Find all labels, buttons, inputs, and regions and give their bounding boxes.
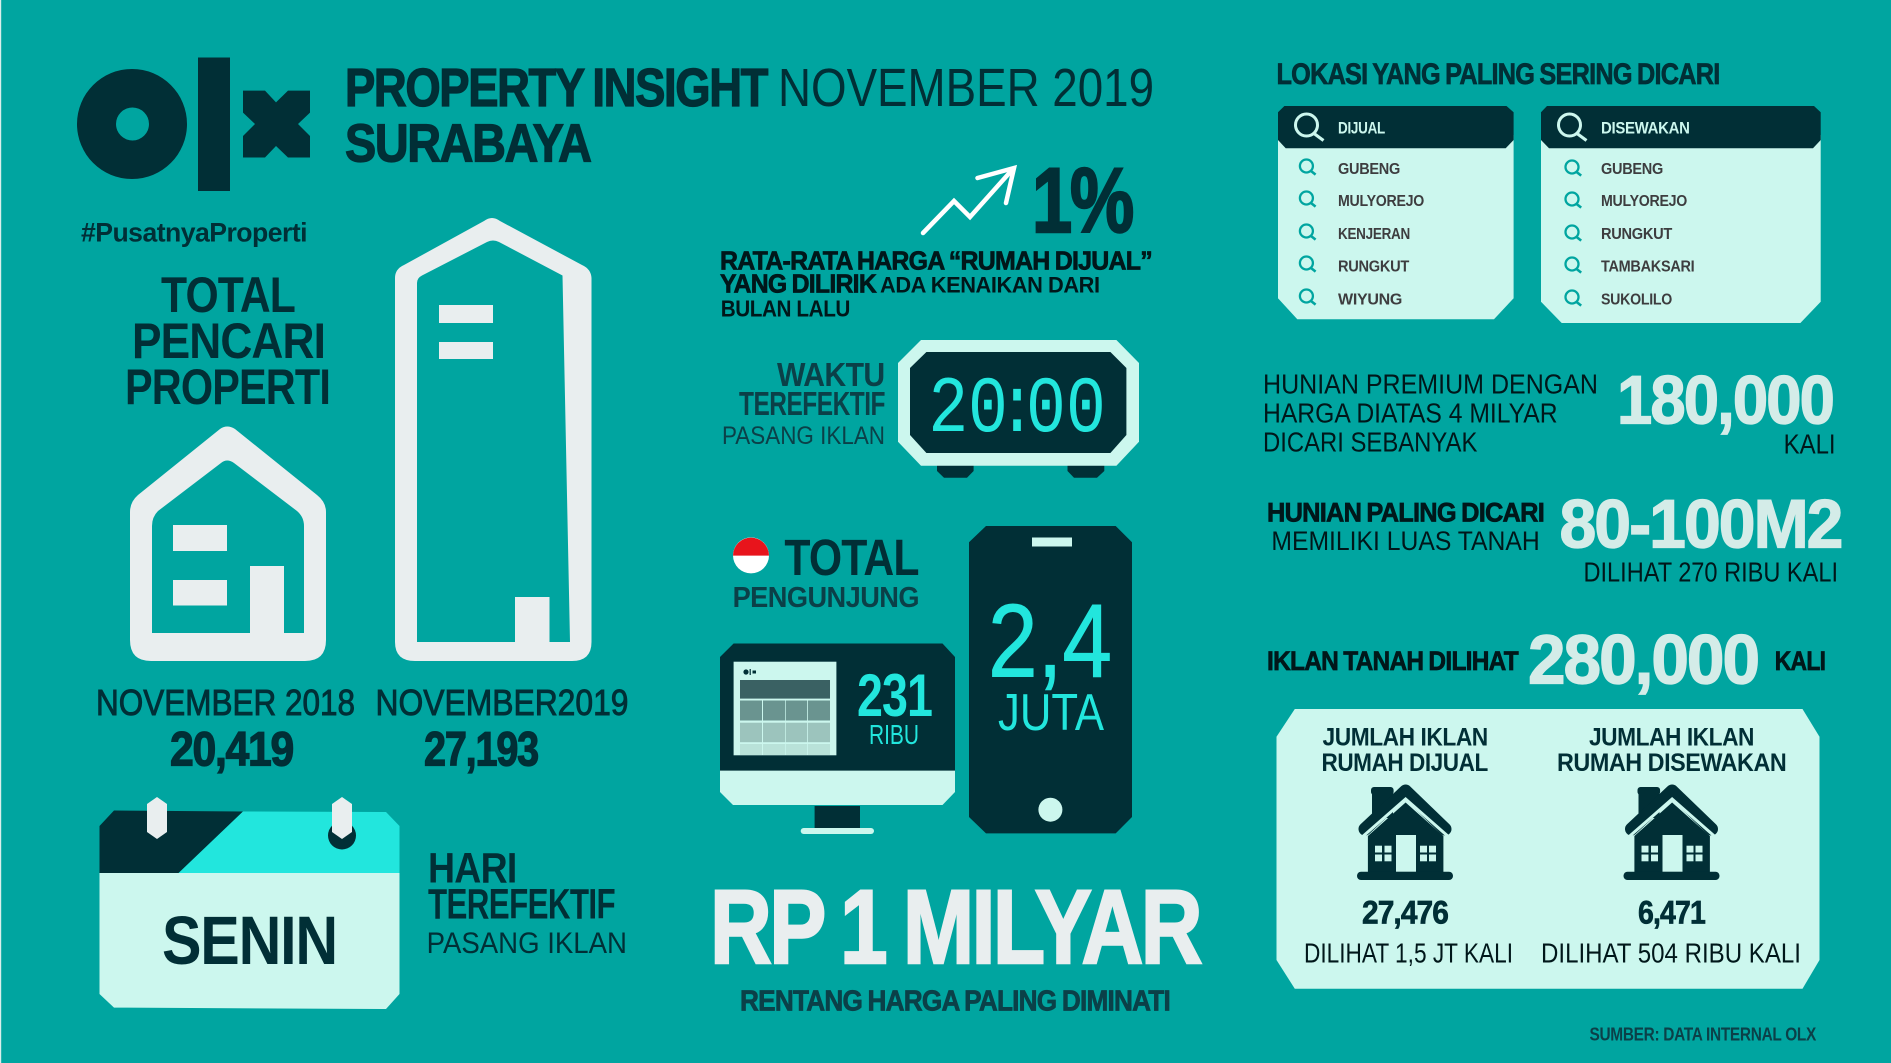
panel: jumlah iklan [1276, 709, 1820, 989]
panel: dijual: MULYOREJO [1338, 193, 1424, 210]
hashtag: #PusatnyaProperti [81, 218, 307, 248]
stat: hunian premium: 180,000 [1617, 361, 1833, 438]
title: PROPERTY INSIGHT [345, 58, 768, 118]
panel: dijual: WIYUNG [1338, 291, 1402, 308]
panel: disewakan: SUKOLILO [1601, 291, 1672, 308]
jumlah iklan rumah disewakan: 6,471 [1638, 894, 1705, 930]
stat: hunian premium: DICARI SEBANYAK [1263, 427, 1478, 458]
stat: hunian premium: KALI [1784, 428, 1836, 459]
stat: hunian paling dicari: DILIHAT 270 RIBU KALI [1584, 557, 1838, 588]
heading: total pengunjung [733, 529, 919, 614]
stat: november 2018: 20,419 [170, 724, 293, 776]
panel: disewakan: GUBENG [1601, 161, 1663, 178]
icon: tall building 2019 [395, 218, 592, 661]
stat: hunian paling dicari: HUNIAN PALING DICARI [1267, 498, 1544, 528]
logo: OLX [77, 58, 310, 191]
icon: house [1357, 787, 1453, 880]
icon: smartphone 2,4 juta: JUTA [998, 684, 1104, 742]
icon: smartphone 2,4 juta [969, 526, 1132, 833]
jumlah iklan rumah disewakan [1541, 724, 1801, 969]
panel: dijual: DIJUAL [1338, 118, 1385, 137]
icon: desktop monitor 231 ribu: RIBU [869, 719, 919, 750]
heading: total pengunjung: PENGUNJUNG [733, 582, 919, 614]
heading: total pengunjung: TOTAL [784, 529, 919, 586]
stat: november 2019: 27,193 [424, 724, 538, 776]
text: hari terefektif: PASANG IKLAN [427, 927, 627, 960]
icon: small building 2018 [130, 426, 326, 661]
icon: indonesian flag [733, 537, 769, 573]
stat: november 2018 [96, 682, 355, 776]
stat: hunian premium: HUNIAN PREMIUM DENGAN [1263, 368, 1598, 399]
text: waktu terefektif: TEREFEKTIF [739, 385, 885, 422]
title: SURABAYA [345, 114, 591, 174]
stat: hunian premium [1263, 361, 1836, 459]
stat: iklan tanah: IKLAN TANAH DILIHAT [1267, 646, 1519, 676]
icon: calendar senin: SENIN [162, 902, 337, 979]
stat: hunian premium: HARGA DIATAS 4 MILYAR [1263, 398, 1558, 429]
heading: lokasi: LOKASI YANG PALING SERING DICARI [1276, 58, 1720, 91]
panel: disewakan: DISEWAKAN [1601, 118, 1690, 137]
caption: rentang harga: RENTANG HARGA PALING DIMINATI [740, 986, 1170, 1018]
text: rata-rata harga [720, 245, 1152, 322]
stat: november 2019 [376, 682, 628, 776]
panel: dijual: RUNGKUT [1338, 258, 1410, 275]
icon: digital clock: 20:00 [928, 366, 1106, 456]
panel: disewakan [1541, 106, 1821, 323]
stat: iklan tanah [1267, 620, 1825, 698]
icon: house [1624, 787, 1720, 880]
text: rata-rata harga: RATA-RATA HARGA “RUMAH DIJUAL” [720, 245, 1152, 275]
stat: hunian paling dicari: 80-100M2 [1560, 485, 1842, 562]
title: NOVEMBER 2019 [778, 58, 1154, 118]
icon: digital clock [898, 340, 1139, 478]
jumlah iklan rumah dijual: RUMAH DIJUAL [1322, 749, 1488, 777]
text: rata-rata harga: ADA KENAIKAN DARI [880, 273, 1100, 298]
source note: SUMBER: DATA INTERNAL OLX [1590, 1025, 1816, 1045]
jumlah iklan rumah disewakan: JUMLAH IKLAN [1589, 724, 1754, 752]
text: hari terefektif: TEREFEKTIF [428, 880, 615, 928]
heading: total pencari properti: TOTAL [161, 267, 295, 323]
panel: disewakan: RUNGKUT [1601, 226, 1673, 243]
icon: desktop monitor 231 ribu [720, 644, 955, 834]
jumlah iklan rumah disewakan: DILIHAT 504 RIBU KALI [1541, 938, 1801, 969]
stat: rp 1 milyar: RP 1 MILYAR [710, 869, 1201, 986]
heading: total pencari properti [125, 267, 330, 415]
text: waktu terefektif: PASANG IKLAN [722, 422, 885, 450]
stat: hunian paling dicari [1267, 485, 1842, 588]
stat: 1 percent: 1% [1032, 150, 1133, 252]
panel: dijual [1278, 106, 1514, 319]
jumlah iklan rumah disewakan: RUMAH DISEWAKAN [1557, 749, 1786, 777]
icon: smartphone 2,4 juta: 2,4 [988, 583, 1112, 699]
stat: iklan tanah: KALI [1775, 646, 1825, 676]
panel: dijual: GUBENG [1338, 161, 1400, 178]
title [345, 58, 1154, 174]
icon: desktop monitor 231 ribu: 231 [857, 662, 932, 729]
jumlah iklan rumah dijual: 27,476 [1362, 894, 1448, 930]
panel: disewakan: MULYOREJO [1601, 193, 1687, 210]
icon: rising arrow [923, 168, 1014, 233]
icon: calendar senin [100, 797, 400, 1009]
text: waktu terefektif: WAKTU [777, 356, 885, 393]
text: waktu terefektif [722, 356, 885, 450]
text: hari terefektif: HARI [428, 844, 516, 892]
heading: total pencari properti: PENCARI [132, 313, 325, 369]
jumlah iklan rumah dijual: DILIHAT 1,5 JT KALI [1304, 938, 1513, 969]
text: hari terefektif [427, 844, 627, 960]
stat: hunian paling dicari: MEMILIKI LUAS TANAH [1271, 526, 1540, 556]
stat: november 2018: NOVEMBER 2018 [96, 682, 355, 723]
heading: total pencari properti: PROPERTI [125, 359, 330, 415]
jumlah iklan rumah dijual [1304, 724, 1513, 969]
panel: dijual: KENJERAN [1338, 226, 1410, 243]
stat: november 2019: NOVEMBER2019 [376, 682, 628, 723]
text: rata-rata harga: BULAN LALU [721, 296, 850, 322]
stat: iklan tanah: 280,000 [1528, 620, 1758, 698]
jumlah iklan rumah dijual: JUMLAH IKLAN [1322, 724, 1488, 752]
panel: disewakan: TAMBAKSARI [1601, 258, 1694, 275]
text: rata-rata harga: YANG DILIRIK [720, 269, 877, 299]
